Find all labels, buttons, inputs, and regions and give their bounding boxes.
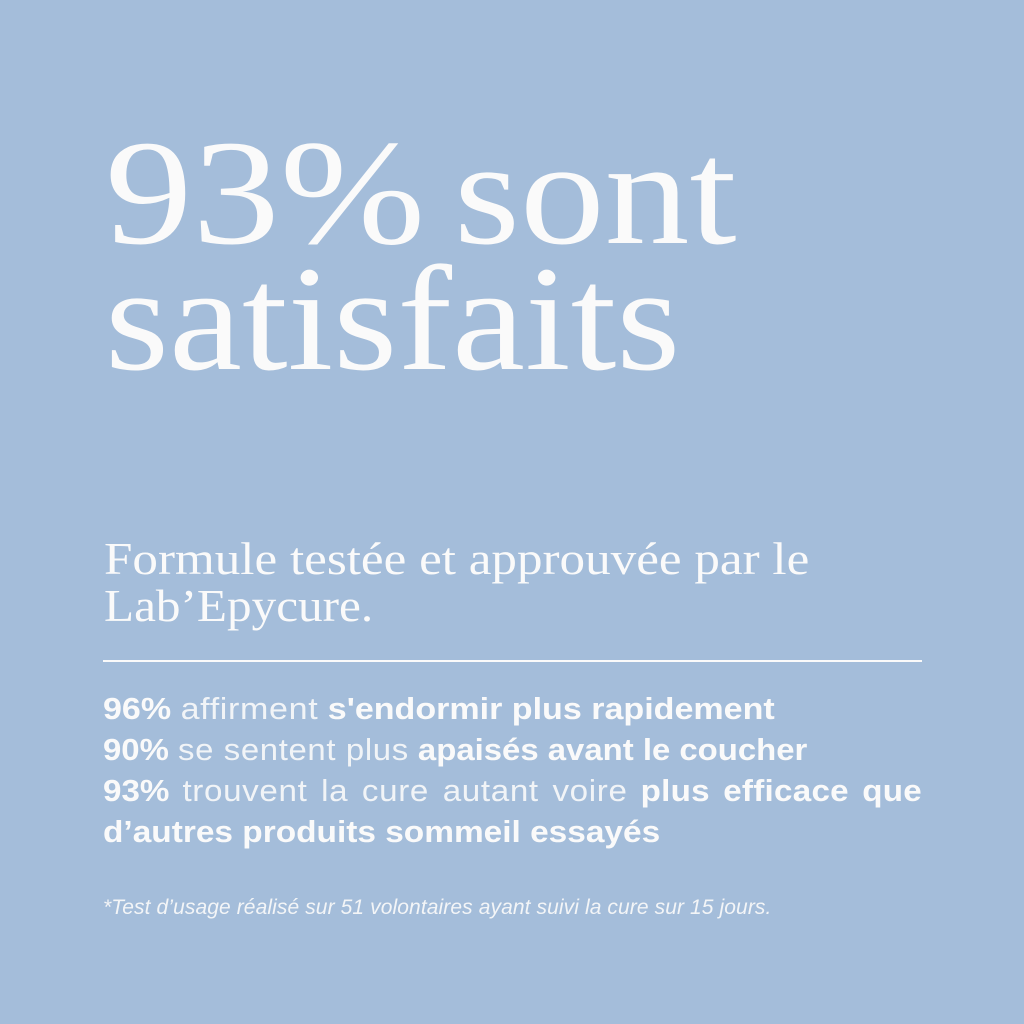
subtitle line 1: Formule testée et approuvée par le xyxy=(104,533,809,584)
title word: 93%: 93% xyxy=(105,110,425,276)
stat: 90%: 90% se sentent plus apaisés avant le coucher xyxy=(103,732,807,767)
stat: 93%: 93% trouvent la cure autant voire plus efficace que xyxy=(103,773,922,808)
title xyxy=(105,110,737,402)
subtitle xyxy=(104,533,809,631)
stat: 93% continued: d’autres produits sommeil essayés xyxy=(103,814,660,849)
statistics list xyxy=(103,691,922,849)
subtitle line 2: Lab’Epycure. xyxy=(104,580,373,631)
stat: 96%: 96% affirment s'endormir plus rapidement xyxy=(103,691,775,726)
divider xyxy=(103,660,922,662)
title word: sont: sont xyxy=(454,110,737,276)
title line 2: satisfaits xyxy=(105,236,680,402)
footnote: *Test d’usage réalisé sur 51 volontaires ayant suivi la cure sur 15 jours. xyxy=(103,896,771,919)
